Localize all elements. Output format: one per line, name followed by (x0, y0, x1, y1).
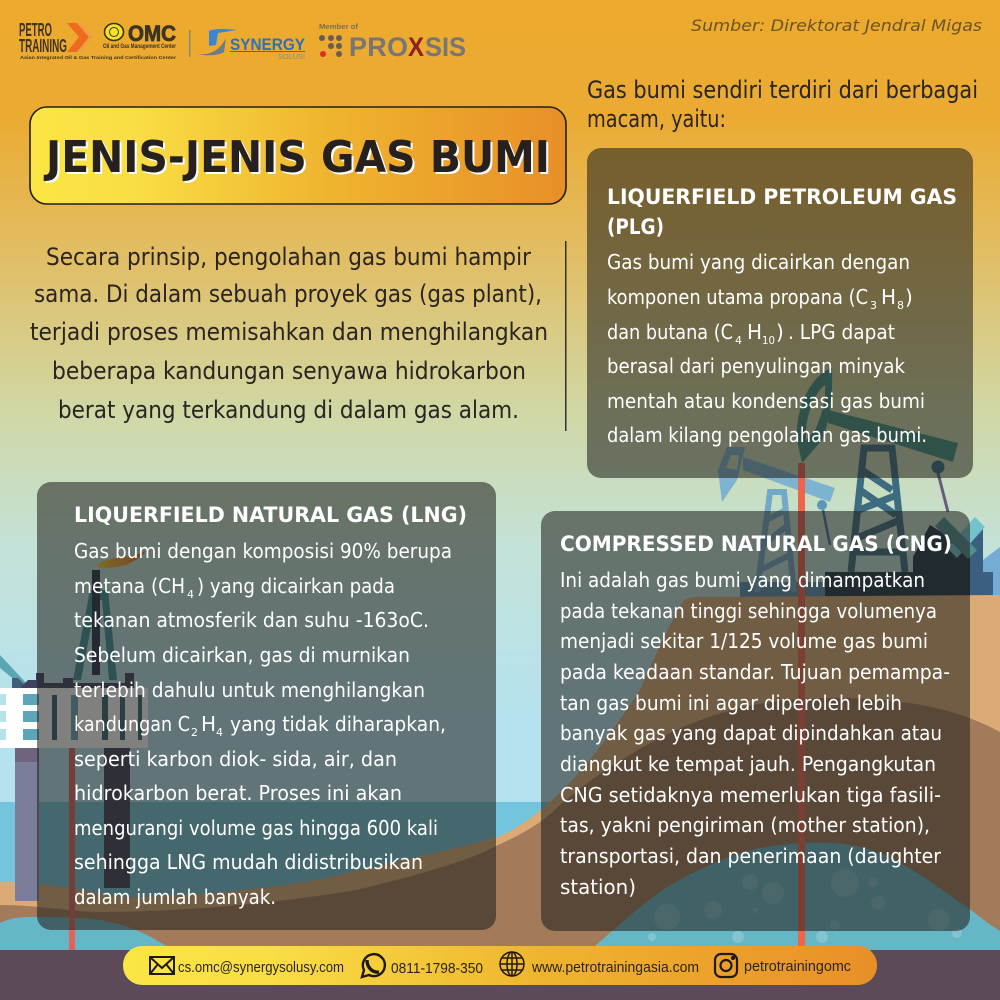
logo: Petro Training (19, 20, 176, 60)
logo: Synergy Solusi (197, 29, 306, 61)
text: LPG description: 8 (897, 299, 904, 312)
text: LNG description: 4 (187, 588, 194, 601)
icon: instagram (715, 954, 737, 977)
text: LPG description: ) (905, 285, 913, 309)
text: CNG description: pada tekanan tinggi sehingga volumenya (560, 599, 937, 623)
text: CNG description: menjadi sekitar 1/125 volume gas bumi (560, 629, 928, 653)
text: LPG description: 3 (870, 299, 877, 312)
intro paragraph: berat yang terkandung di dalam gas alam. (58, 396, 519, 424)
text: LPG description: mentah atau kondensasi gas bumi (607, 389, 925, 413)
panel: LPG (587, 148, 973, 478)
text: LNG description: 4 (216, 726, 223, 739)
logo: Synergy Solusi: SOLUSI (278, 54, 305, 61)
text: LNG description: kandungan C (74, 712, 190, 736)
illustration: sandy and brown hills (0, 595, 1000, 950)
illustration: offshore platform (0, 550, 148, 748)
email address: cs.omc@synergysolusy.com (178, 959, 344, 976)
footer band (0, 950, 1000, 1000)
text: LNG description (74, 539, 452, 909)
text: LNG description: Sebelum dicairkan, gas di murnikan (74, 643, 410, 667)
intro paragraph: beberapa kandungan senyawa hidrokarbon (52, 357, 526, 385)
heading: LNG: LIQUERFIELD NATURAL GAS (LNG) (74, 503, 467, 527)
text: CNG description: transportasi, dan penerimaan (daughter (560, 844, 942, 868)
illustration: red pipes (69, 463, 805, 964)
title: JENIS-JENIS GAS BUMI (43, 132, 550, 183)
intro paragraph: terjadi proses memisahkan dan menghilangkan (30, 318, 548, 346)
logo: Proxsis: PRO (349, 32, 408, 62)
logo: Proxsis (319, 24, 466, 62)
text: LNG description: H (201, 712, 216, 736)
icon: whatsapp (362, 954, 385, 977)
heading: LPG: (PLG) (607, 215, 664, 239)
text: LPG description: H (747, 320, 762, 344)
text: LPG description: dan butana (C (607, 320, 733, 344)
contact bar (123, 946, 877, 985)
background: sea (0, 802, 1000, 952)
icon: email (150, 957, 174, 974)
intro paragraph: sama. Di dalam sebuah proyek gas (gas plant), (34, 280, 542, 308)
text: LNG description: Gas bumi dengan komposisi 90% berupa (74, 539, 452, 563)
illustration: platform legs (15, 748, 130, 901)
text: CNG description: banyak gas yang dapat dipindahkan atau (560, 721, 942, 745)
logo: Proxsis: Member of (319, 24, 359, 31)
lead-in text (587, 76, 978, 133)
text: LNG description: 2 (191, 726, 198, 739)
heading: LPG: LIQUERFIELD PETROLEUM GAS (607, 185, 957, 209)
logo row (19, 20, 466, 62)
logo: Proxsis: SIS (425, 32, 466, 62)
text: CNG description: Ini adalah gas bumi yang dimampatkan (560, 568, 925, 592)
text: LNG description: hidrokarbon berat. Proses ini akan (74, 781, 402, 805)
logo: Petro Training: TRAINING (19, 36, 67, 56)
title banner (30, 107, 566, 204)
logo: OMC: OMC (128, 21, 176, 46)
logo: OMC (103, 21, 177, 50)
title: JENIS-JENIS GAS BUMI (45, 134, 552, 185)
logo: Petro Training: Asian Integrated Oil & Gas Training and Certification Center (20, 55, 176, 60)
text: CNG description: tan gas bumi ini agar diperoleh lebih (560, 691, 902, 715)
icon: globe (500, 952, 524, 976)
text: LNG description: sehingga LNG mudah didistribusikan (74, 850, 423, 874)
text: LPG description: komponen utama propana (C (607, 285, 868, 309)
illustration: pump jacks and refinery (718, 368, 1000, 598)
text: LPG description (607, 250, 927, 447)
heading: CNG: COMPRESSED NATURAL GAS (CNG) (560, 532, 952, 556)
text: CNG description: tas, yakni pengiriman (mother station), (560, 813, 930, 837)
text: CNG description: pada keadaan standar. Tujuan pemampa- (560, 660, 950, 684)
instagram handle: petrotrainingomc (744, 958, 851, 975)
text: LPG description: berasal dari penyulingan minyak (607, 354, 905, 378)
logo: Synergy Solusi: SYNERGY (230, 35, 306, 54)
heading: LPG (607, 185, 957, 239)
panel: CNG (541, 511, 970, 931)
divider line (565, 241, 566, 431)
text: LPG description: dalam kilang pengolahan gas bumi. (607, 423, 927, 447)
text: CNG description: station) (560, 875, 636, 899)
text: LNG description: mengurangi volume gas hingga 600 kali (74, 816, 438, 840)
phone number: 0811-1798-350 (391, 960, 483, 977)
text: LPG description: Gas bumi yang dicairkan dengan (607, 250, 910, 274)
text: LPG description: . LPG dapat (788, 320, 895, 344)
text: LNG description: dalam jumlah banyak. (74, 885, 276, 909)
text: LPG description: H (881, 285, 896, 309)
lead-in text: macam, yaitu: (587, 105, 726, 133)
text: CNG description: diangkut ke tempat jauh. Pengangkutan (560, 752, 936, 776)
text: CNG description (560, 568, 950, 899)
website: www.petrotrainingasia.com (531, 959, 699, 976)
logo: Petro Training: PETRO (19, 20, 52, 40)
logo: Proxsis: X (408, 32, 424, 62)
logo: OMC: Oil and Gas Management Center (103, 44, 177, 50)
text: LNG description: metana (CH (74, 574, 185, 598)
text: LPG description: ) (776, 320, 784, 344)
text: LNG description: ) yang dicairkan pada (197, 574, 395, 598)
text: LNG description: tekanan atmosferik dan suhu -163oC. (74, 608, 429, 632)
intro paragraph: Secara prinsip, pengolahan gas bumi hampir (46, 243, 531, 271)
text: LPG description: 10 (762, 334, 775, 347)
source note: Sumber: Direktorat Jendral Migas (691, 16, 982, 35)
text: LPG description: 4 (735, 334, 742, 347)
panel: LNG (37, 482, 496, 930)
text: CNG description: CNG setidaknya memerlukan tiga fasili- (560, 783, 941, 807)
text: LNG description: yang tidak diharapkan, (230, 712, 446, 736)
intro paragraph (30, 243, 548, 424)
text: LNG description: terlebih dahulu untuk menghilangkan (74, 678, 425, 702)
text: LNG description: seperti karbon diok- sida, air, dan (74, 747, 397, 771)
